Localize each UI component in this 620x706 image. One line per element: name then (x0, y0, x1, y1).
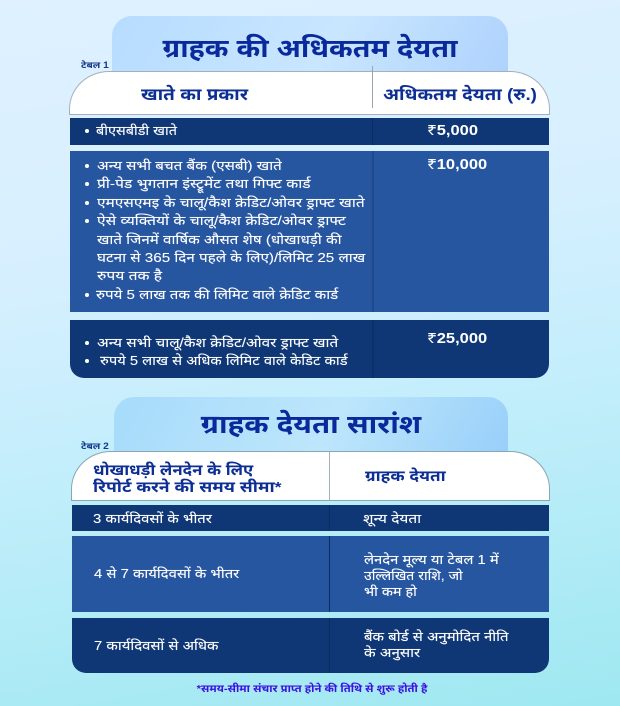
liability text: लेनदेन मूल्य या टेबल 1 में (364, 552, 499, 567)
row: 10,000 liability accounts (70, 151, 549, 312)
amount: 25,000: ₹25,000 (427, 330, 487, 347)
column heading: reporting time limit: धोखाधड़ी लेनदेन के लिए (93, 462, 253, 479)
bulleted list: प्री-पेड भुगतान इंस्ट्रूमेंट तथा गिफ्ट कार्ड (97, 176, 311, 191)
bulleted list: घटना से 365 दिन पहले के लिए)/लिमिट 25 लाख (97, 250, 365, 265)
amount: 5,000: ₹5,000 (427, 122, 478, 139)
bulleted list: अन्य सभी चालू/कैश क्रेडिट/ओवर ड्राफ्ट खाते (97, 335, 338, 350)
row text: 4 से 7 कार्यदिवसों के भीतर (94, 566, 239, 581)
heading: table 2 title: ग्राहक देयता सारांश (201, 409, 421, 439)
header: table 2 (71, 451, 550, 501)
bulleted list: खाते जिनमें वार्षिक औसत शेष (धोखाधड़ी की (97, 232, 342, 247)
heading: table 1 title: ग्राहक की अधिकतम देयता (163, 33, 457, 63)
divider (329, 618, 330, 673)
divider (372, 320, 374, 378)
label: table 2: टेबल 2 (81, 441, 109, 451)
bulleted list (85, 158, 366, 302)
divider (329, 452, 330, 500)
row: 25,000 liability accounts (70, 320, 549, 378)
bulleted list: रुपय तक है (97, 268, 162, 283)
divider (372, 151, 374, 312)
liability text: बैंक बोर्ड से अनुमोदित नीति (364, 629, 509, 644)
column heading: account type: खाते का प्रकार (141, 85, 248, 104)
row: 4 to 7 working days (72, 536, 549, 612)
divider (329, 505, 330, 531)
column heading: reporting time limit (93, 461, 282, 496)
column heading: maximum liability: अधिकतम देयता (रु.) (383, 85, 537, 104)
divider (329, 536, 330, 612)
divider (372, 118, 373, 145)
label: table 1: टेबल 1 (81, 60, 109, 70)
footnote: *समय-सीमा संचार प्राप्त होने की तिथि से शुरू होती है (197, 683, 427, 695)
row text: बीएसबीडी खाते (96, 123, 177, 138)
column heading: reporting time limit: रिपोर्ट करने की समय सीमा* (93, 479, 282, 496)
bulleted list: रुपये 5 लाख तक की लिमिट वाले क्रेडिट कार्ड (96, 287, 338, 302)
row: within 3 working days (72, 505, 549, 531)
bulleted list: एमएसएमइ के चालू/कैश क्रेडिट/ओवर ड्राफ्ट खाते (97, 195, 365, 210)
bullet (85, 129, 89, 133)
title tab: table 2 (114, 397, 508, 453)
column heading: customer liability: ग्राहक देयता (365, 468, 446, 485)
row text: 3 कार्यदिवसों के भीतर (93, 511, 212, 526)
liability text: शून्य देयता (363, 511, 421, 526)
liability text: उल्लिखित राशि, जो (364, 568, 463, 583)
liability text: के अनुसार (364, 645, 420, 660)
bulleted list: ऐसे व्यक्तियों के चालू/कैश क्रेडिट/ओवर ड्राफ्ट (97, 213, 346, 228)
bulleted list (85, 335, 348, 368)
liability text: भी कम हो (364, 584, 417, 599)
row: BSBD accounts (70, 118, 549, 145)
amount: 10,000: ₹10,000 (427, 156, 487, 173)
row text: 7 कार्यदिवसों से अधिक (94, 638, 218, 653)
liability text (364, 552, 500, 599)
liability text (364, 629, 509, 660)
bulleted list: अन्य सभी बचत बैंक (एसबी) खाते (97, 158, 282, 173)
title tab: table 1 (112, 16, 508, 74)
header: table 1 (69, 71, 550, 115)
bulleted list: रुपये 5 लाख से अधिक लिमिट वाले केडिट कार्ड (100, 353, 348, 368)
row: more than 7 working days (72, 618, 549, 673)
column divider: table 1 header (372, 66, 373, 108)
